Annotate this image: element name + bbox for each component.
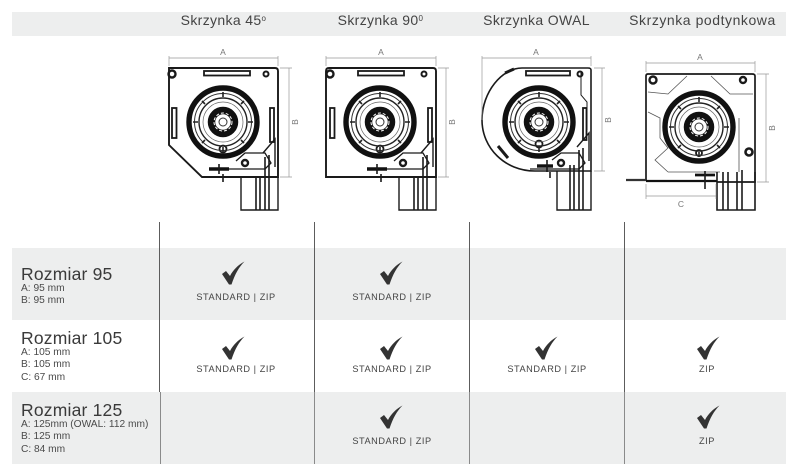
dimension A: A: [378, 47, 384, 57]
label: 125 / 90: STANDARD | ZIP: [352, 436, 432, 446]
row details: Rozmiar 105: C: 67 mm: [21, 372, 65, 383]
dimension B: [594, 68, 613, 171]
dimension B: [757, 74, 777, 182]
dimension A: A: [220, 47, 226, 57]
heading: Skrzynka OWAL: Skrzynka OWAL: [483, 12, 590, 28]
guide rail: [530, 133, 591, 210]
label: 125 / podtynkowa: ZIP: [699, 436, 715, 446]
row details: Rozmiar 125: C: 84 mm: [21, 444, 65, 455]
row band: Rozmiar 125: [12, 392, 786, 464]
dimension C: C: [678, 199, 684, 209]
diagrams: [167, 47, 777, 211]
check: 105 / OWAL: [535, 336, 558, 360]
check: 125 / 90: [380, 406, 402, 428]
row label: Rozmiar 105: Rozmiar 105: [21, 328, 122, 348]
dimension B: B: [447, 119, 457, 125]
check: 105 / podtynkowa: [697, 336, 720, 360]
dimension A: A: [533, 47, 539, 57]
dimension A: A: [697, 52, 703, 62]
dimension B: [280, 68, 300, 177]
heading: Skrzynka 45: Skrzynka 45o: [181, 12, 266, 28]
heading: Skrzynka podtynkowa: Skrzynka podtynkowa: [629, 12, 776, 28]
row details: Rozmiar 95: [21, 283, 65, 306]
row details: Rozmiar 125: B: 125 mm: [21, 431, 70, 442]
dimension A: [646, 52, 755, 72]
dimension B: [438, 68, 457, 177]
check: 105 / 90: [380, 336, 402, 360]
row details: Rozmiar 95: A: 95 mm: [21, 283, 65, 294]
diagram: Skrzynka podtynkowa: [626, 52, 777, 210]
dimension A: [169, 47, 278, 66]
dimension B: B: [603, 117, 613, 123]
row details: Rozmiar 95: B: 95 mm: [21, 295, 65, 306]
check: 95 / 90: [380, 262, 402, 284]
label: 105 / podtynkowa: ZIP: [699, 364, 715, 374]
dimension C: [646, 184, 716, 209]
row band: Rozmiar 95: [12, 248, 786, 320]
guide rail: [695, 170, 755, 210]
row label: Rozmiar 125: Rozmiar 125: [21, 400, 122, 420]
heading: Skrzynka 90: Skrzynka 900: [338, 12, 423, 28]
dimension A: [326, 47, 436, 66]
diagram: Skrzynka 90: [326, 47, 457, 210]
row details: Rozmiar 105: B: 105 mm: [21, 359, 70, 370]
check: 125 / podtynkowa: [697, 406, 720, 428]
diagram: Skrzynka 45: [168, 47, 300, 210]
header band: [12, 12, 786, 36]
dimension B: B: [290, 119, 300, 125]
row details: Rozmiar 105: [21, 347, 70, 383]
label: 105 / 90: STANDARD | ZIP: [352, 364, 432, 374]
label: 105 / 45: STANDARD | ZIP: [196, 364, 276, 374]
label: 95 / 45: STANDARD | ZIP: [196, 292, 276, 302]
row label: Rozmiar 95: Rozmiar 95: [21, 264, 112, 284]
label: 105 / OWAL: STANDARD | ZIP: [507, 364, 587, 374]
dimension A: [482, 47, 591, 120]
diagram: Skrzynka OWAL: [482, 47, 613, 210]
row details: Rozmiar 125: [21, 419, 148, 455]
label: 95 / 90: STANDARD | ZIP: [352, 292, 432, 302]
row details: Rozmiar 125: A: 125mm (OWAL: 112 mm): [21, 419, 148, 430]
check: 95 / 45: [222, 262, 244, 284]
row details: Rozmiar 105: A: 105 mm: [21, 347, 70, 358]
check: 105 / 45: [222, 336, 244, 360]
dimension B: B: [767, 125, 777, 131]
